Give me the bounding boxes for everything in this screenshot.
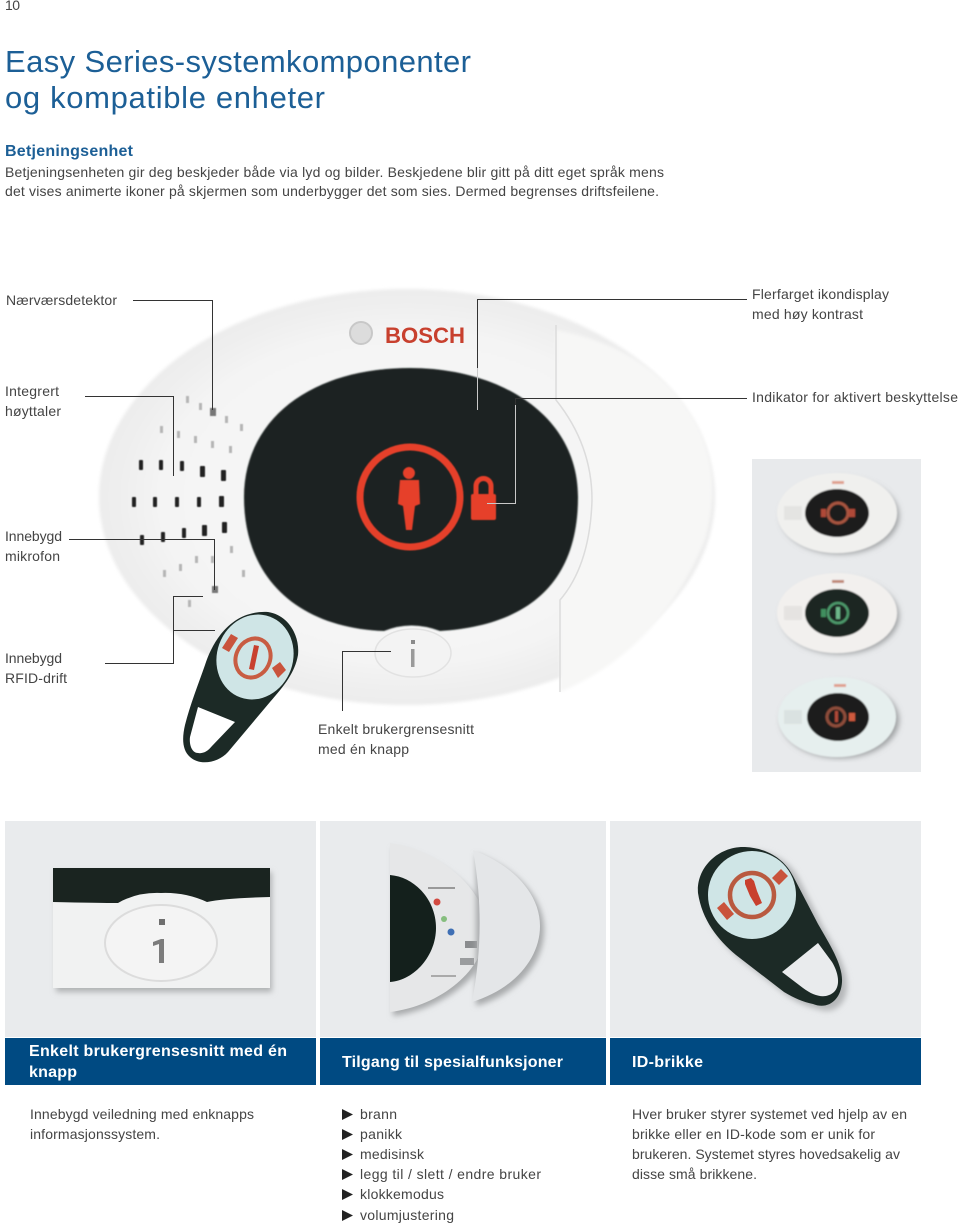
header bar: special functions [320, 1038, 606, 1085]
list: special functions: medisinsk [360, 1146, 425, 1162]
speaker and microphone holes [132, 396, 245, 607]
title: Easy Series-systemkomponenter [5, 44, 471, 79]
BOSCH logo: BOSCH [385, 323, 465, 348]
label: Integrert høyttaler: høyttaler [5, 403, 61, 419]
list: special functions: legg til / slett / endre bruker [360, 1166, 541, 1182]
label: Nærværsdetektor: Nærværsdetektor [6, 292, 117, 308]
leader lines [69, 300, 747, 711]
callout labels [5, 286, 958, 757]
text: one-button description: Innebygd veiledning med enknapps [30, 1106, 254, 1122]
label: Innebygd RFID-drift: RFID-drift [5, 670, 67, 686]
header bar: ID tag [610, 1038, 921, 1085]
panel: ID tag [610, 821, 921, 1037]
one-touch button [375, 629, 451, 677]
text: ID tag description: brukeren. Systemet styres hovedsakelig av [632, 1146, 900, 1162]
ID fob on device [183, 604, 305, 762]
text: one-button description: informasjonssystem. [30, 1126, 160, 1142]
heading: Betjeningsenhet: Betjeningsenhet [5, 143, 134, 160]
button icon: i [105, 905, 217, 981]
icon: padlock [471, 479, 496, 520]
panel: status variations [752, 459, 921, 772]
label: Innebygd RFID-drift [5, 650, 67, 686]
intro text: det vises animerte ikoner på skjermen som underbygger det som sies. Dermed begrenses driftsfeilene. [5, 183, 659, 199]
label: Indikator for aktivert beskyttelse: Indikator for aktivert beskyttelse [752, 389, 958, 405]
intro text: Betjeningsenheten gir deg beskjeder både via lyd og bilder. Beskjedene blir gitt på ditt eget språk mens [5, 164, 664, 180]
label: Innebygd mikrofon [5, 528, 62, 564]
label: Enkelt brukergrensesnitt [318, 721, 474, 757]
device: red status [777, 473, 899, 554]
title [5, 44, 471, 115]
list: special functions: klokkemodus [360, 1186, 444, 1202]
text: ID tag description [632, 1106, 907, 1182]
label: Integrert høyttaler: Integrert [5, 383, 59, 399]
label: Enkelt brukergrensesnitt: Enkelt brukergrensesnitt [318, 721, 474, 737]
header bar: special functions: Tilgang til spesialfunksjoner [342, 1054, 563, 1071]
header bar: one-button interface: Enkelt brukergrensesnitt med én [29, 1043, 287, 1060]
list: special functions: panikk [360, 1126, 403, 1142]
list: special functions: brann [360, 1106, 397, 1122]
label: Flerfarget ikondisplay: Flerfarget ikondisplay [752, 286, 889, 302]
header bar: ID tag: ID-brikke [632, 1054, 703, 1071]
list: special functions [342, 1106, 541, 1223]
open cover: left piece [390, 843, 492, 1016]
label: Innebygd mikrofon: mikrofon [5, 548, 60, 564]
label: Flerfarget ikondisplay [752, 286, 889, 322]
intro text [5, 164, 664, 199]
text: ID tag description: brikke eller en ID-kode som er unik for [632, 1126, 875, 1142]
header bar: one-button interface: knapp [29, 1064, 77, 1081]
label: Innebygd mikrofon: Innebygd [5, 528, 62, 544]
text: one-button description [30, 1106, 254, 1142]
label: Innebygd RFID-drift: Innebygd [5, 650, 62, 666]
label: Integrert høyttaler [5, 383, 61, 419]
text: ID tag description: disse små brikkene. [632, 1166, 757, 1182]
BOSCH logo [350, 322, 465, 348]
text: ID tag description: Hver bruker styrer systemet ved hjelp av en [632, 1106, 907, 1122]
icon: ID fob [698, 847, 847, 1011]
label: Flerfarget ikondisplay: med høy kontrast [752, 306, 863, 322]
icon: person in ring [360, 447, 460, 547]
panel: one-button interface [5, 821, 316, 1037]
title: og kompatible enheter [5, 80, 325, 115]
list: special functions: volumjustering [360, 1207, 454, 1223]
device photo: control unit [99, 289, 715, 705]
open cover: right piece [472, 850, 544, 1006]
display screen [244, 368, 578, 631]
header bar: one-button interface [5, 1038, 316, 1085]
device: green status [777, 573, 899, 654]
label: Enkelt brukergrensesnitt: med én knapp [318, 741, 409, 757]
device: orange status [778, 677, 899, 758]
panel: hidden special functions [320, 821, 606, 1037]
